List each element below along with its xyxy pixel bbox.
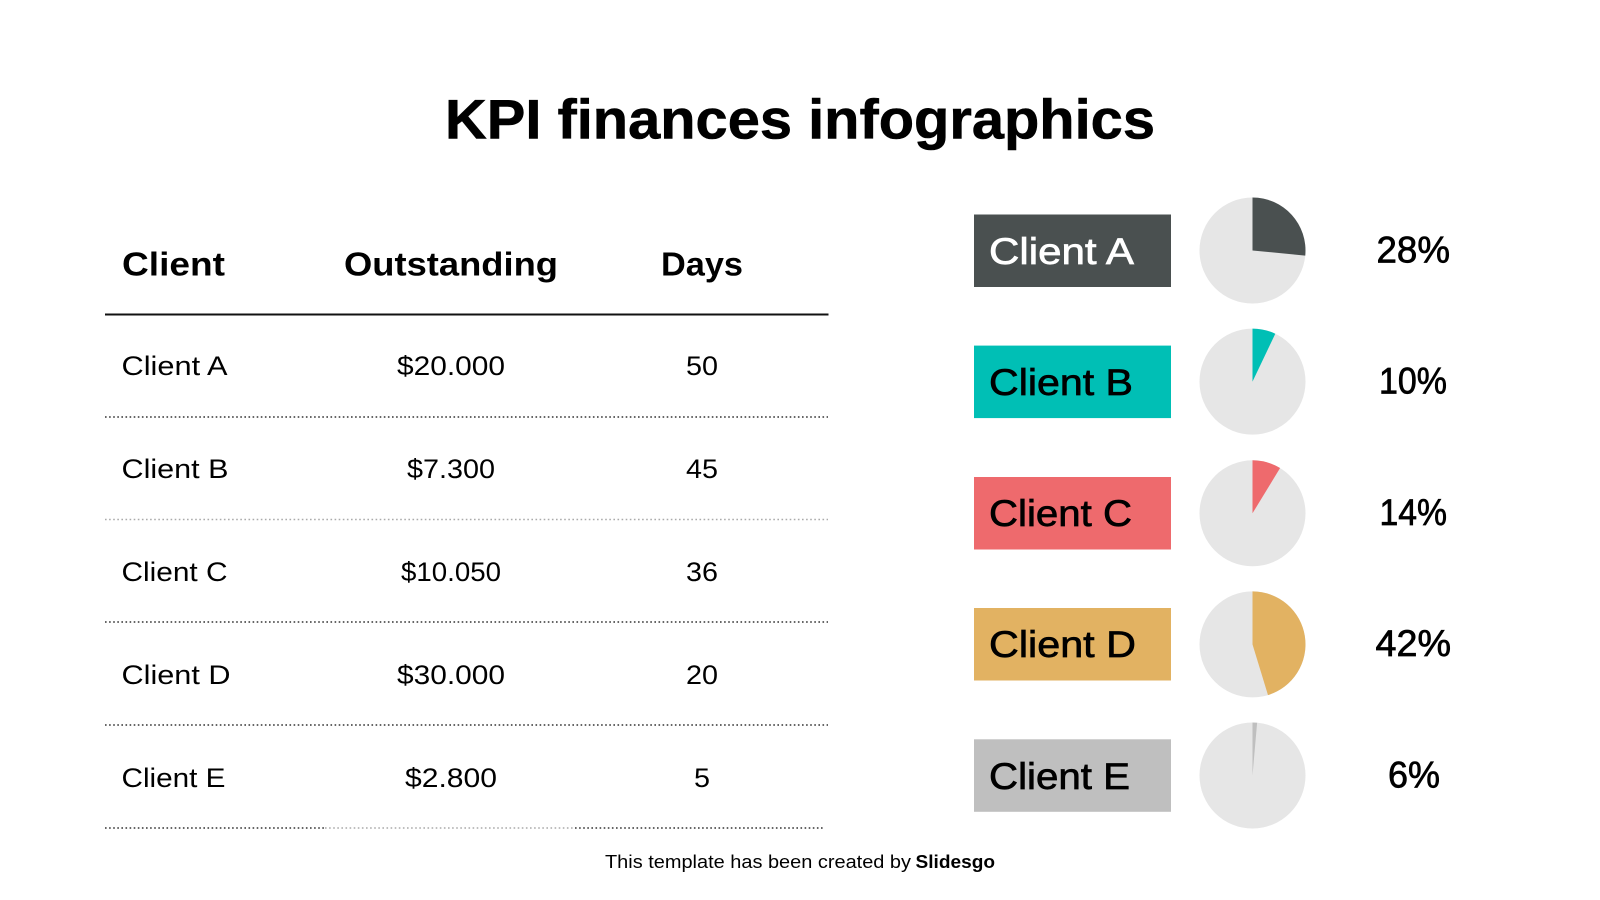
row: Client E: 5: [694, 763, 710, 793]
Client A label, pie and value: Client A: [989, 231, 1134, 272]
row: Client A: 50: [686, 351, 718, 381]
row: Client B: 45: [686, 454, 718, 484]
Client E label, pie and value: Client E: [989, 756, 1130, 797]
row: Client B: Client B: [122, 454, 228, 484]
Client C label, pie and value: Client C: [989, 493, 1132, 534]
panel: client table: [105, 246, 828, 828]
row: Client C: Client C: [122, 557, 228, 587]
row: Client D: 20: [686, 660, 718, 690]
row: Client D: [122, 660, 718, 690]
row: Client A: Client A: [122, 351, 228, 381]
Client D label, pie and value: [974, 591, 1451, 697]
Client B label, pie and value: 10%: [1379, 360, 1447, 402]
row: Client E: Client E: [122, 763, 226, 793]
Client C label, pie and value: [974, 460, 1447, 566]
row: Client A: $20.000: [397, 351, 505, 381]
Client D label, pie and value: Client D: [989, 624, 1136, 665]
panel: client share pies: [974, 198, 1451, 828]
Client A label, pie and value: 28%: [1376, 230, 1450, 270]
row: Client B: [122, 454, 718, 484]
Client D label, pie and value: 42%: [1376, 623, 1451, 664]
row: Client E: $2.800: [405, 763, 497, 793]
row: Client A: [122, 351, 718, 381]
Client E label, pie and value: 6%: [1388, 754, 1440, 796]
table header row: [122, 246, 743, 282]
Client E label, pie and value: [974, 722, 1440, 828]
Client A label, pie and value: [974, 198, 1450, 304]
row: Client B: $7.300: [407, 454, 495, 484]
Client B label, pie and value: [974, 329, 1447, 435]
footer credit: This template has been created by: [605, 852, 911, 872]
row: Client C: [122, 557, 718, 587]
title: KPI finances infographics: [445, 88, 1155, 150]
row: Client E: [122, 763, 710, 793]
Client C label, pie and value: 14%: [1380, 492, 1447, 533]
row: Client C: $10.050: [401, 557, 501, 587]
table header row: Outstanding: [344, 246, 558, 282]
table header row: Days: [661, 246, 743, 282]
footer credit: Slidesgo: [916, 852, 995, 872]
row: Client D: Client D: [122, 660, 230, 690]
table header row: Client: [122, 246, 225, 282]
row: Client D: $30.000: [397, 660, 505, 690]
row: Client C: 36: [686, 557, 718, 587]
Client B label, pie and value: Client B: [989, 362, 1133, 403]
